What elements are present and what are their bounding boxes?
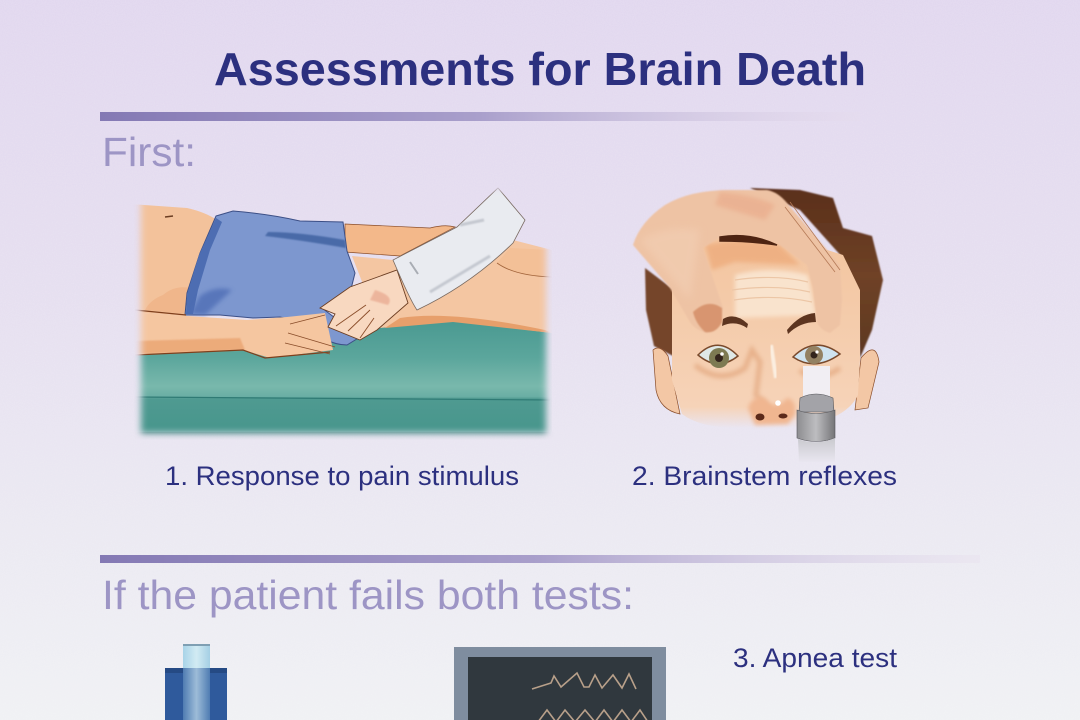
penlight [799, 394, 834, 412]
title: Assessments for Brain Death [214, 43, 866, 95]
heading: first: First: [102, 129, 196, 175]
label 1: 1. Response to pain stimulus [165, 461, 519, 491]
light beam [803, 366, 830, 406]
sleeve [393, 188, 525, 310]
lower arm [130, 312, 333, 358]
doctor hand [320, 270, 408, 340]
label 2: 2. Brainstem reflexes [632, 461, 897, 491]
torso [136, 204, 214, 316]
nose [771, 345, 776, 378]
icon: oxygen cylinder [165, 644, 227, 720]
examiner hand [633, 190, 842, 333]
right eye [793, 345, 840, 364]
bed [130, 320, 552, 440]
illustration: brainstem reflexes [633, 188, 883, 462]
shorts [185, 211, 360, 345]
monitor trace top [532, 673, 636, 689]
far arm [345, 224, 455, 256]
illustration: response to pain stimulus [130, 188, 555, 440]
left eye [698, 345, 738, 364]
hair right [750, 188, 883, 358]
ears [653, 348, 680, 414]
forehead highlight [735, 270, 816, 318]
monitor trace bottom [538, 710, 648, 720]
icon: monitor [454, 647, 666, 720]
heading: if the patient fails: If the patient fails both tests: [102, 572, 634, 618]
label 3: 3. Apnea test [733, 643, 898, 673]
thigh [352, 238, 552, 333]
face [672, 235, 860, 428]
hair left [645, 268, 674, 356]
eye and nose shading [695, 350, 840, 410]
eyebrows [722, 313, 816, 334]
forehead shadow [705, 240, 800, 270]
